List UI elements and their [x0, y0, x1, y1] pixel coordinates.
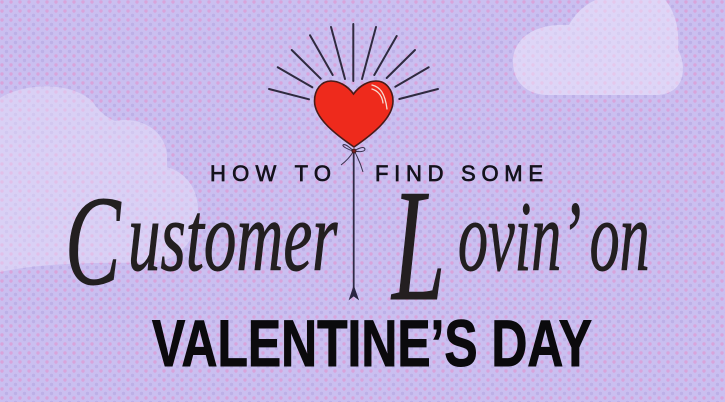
- cloud: left: [0, 86, 198, 272]
- heading line: find some: FIND SOME: [375, 161, 543, 186]
- balloon with rays: [269, 24, 438, 300]
- main heading: valentine's day: VALENTINE’S DAY: [152, 306, 592, 380]
- heart balloon: [314, 81, 393, 147]
- balloon string and arrow: [349, 150, 358, 300]
- heart highlight: [372, 85, 387, 109]
- heading line: how to: HOW TO: [210, 161, 331, 186]
- script heading: customer: C: [65, 171, 121, 312]
- script heading: customer: ustomer: [128, 182, 338, 293]
- rays: [269, 24, 438, 99]
- script heading: lovin' on: L: [391, 156, 445, 334]
- balloon knot and bow: [341, 145, 365, 172]
- script heading: lovin' on: ovin’ on: [458, 181, 650, 292]
- cloud: upper right: [513, 0, 683, 95]
